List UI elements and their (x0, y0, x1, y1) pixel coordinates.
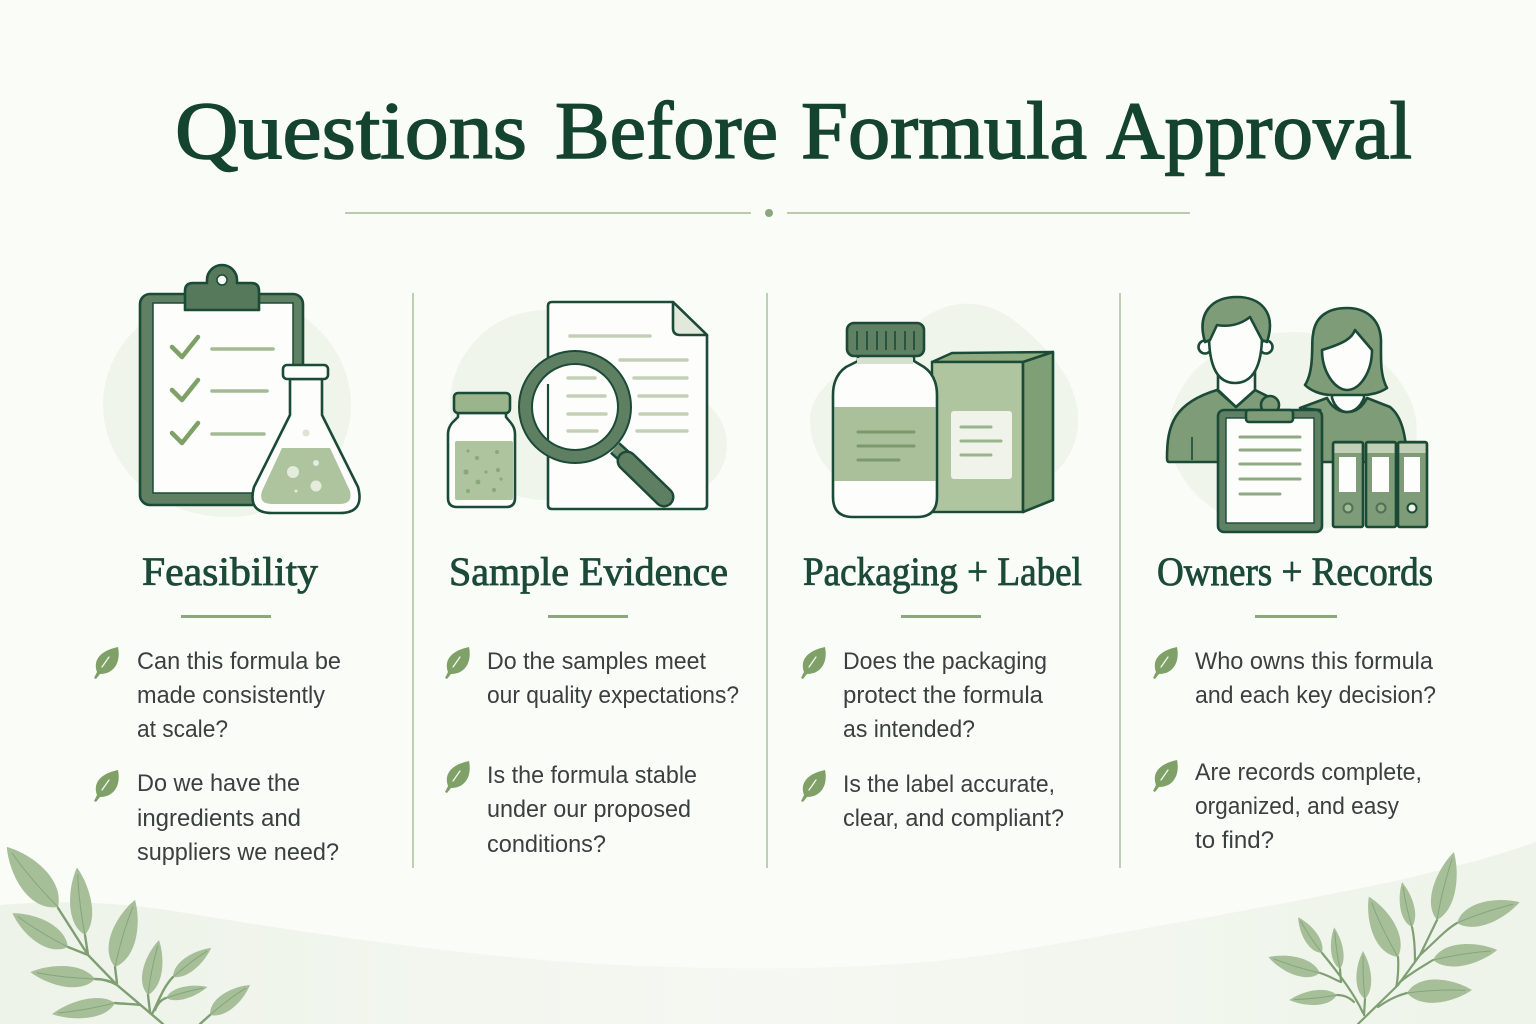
question text: Does the packaging (843, 648, 1047, 675)
woman (1300, 308, 1407, 462)
question text (1195, 759, 1422, 854)
question text: and each key decision? (1195, 682, 1436, 709)
icon: clipboard and flask (103, 265, 360, 517)
question text: Do we have the (137, 770, 300, 797)
question text (843, 648, 1047, 743)
heading underline (1255, 615, 1337, 618)
question text: suppliers we need? (137, 839, 339, 866)
question text: Can this formula be (137, 648, 341, 675)
heading: Packaging + Label (803, 549, 1082, 594)
question text (487, 762, 697, 858)
heading underline (548, 615, 628, 618)
binders (1333, 442, 1427, 527)
icon: jar, document and magnifier (448, 302, 727, 509)
panel: feasibility (94, 265, 360, 866)
heading: Owners + Records (1157, 549, 1433, 594)
background hill (0, 842, 1536, 1024)
heading underline (901, 615, 981, 618)
title: Questions (175, 85, 527, 176)
question text: our quality expectations? (487, 682, 739, 709)
question text: Are records complete, (1195, 759, 1422, 786)
bullet icon (801, 770, 826, 802)
bullet icon (94, 770, 119, 802)
panel: sample evidence (445, 302, 739, 858)
panel: packaging and label (801, 304, 1082, 832)
bullet icon (94, 647, 119, 679)
icon: bottle and box (810, 304, 1078, 517)
heading: Feasibility (142, 549, 318, 594)
question text: clear, and compliant? (843, 805, 1064, 832)
title divider (345, 209, 1190, 217)
question text: Is the formula stable (487, 762, 697, 789)
question text: conditions? (487, 831, 606, 858)
title: Before (555, 85, 778, 176)
question text (137, 770, 339, 866)
icon: two people, clipboard and binders (1167, 297, 1427, 532)
question text (1195, 648, 1436, 709)
title: Approval (1106, 85, 1412, 176)
bullet icon (1153, 760, 1178, 792)
bullet icon (801, 647, 826, 679)
heading underline (181, 615, 271, 618)
bullet icon (445, 647, 470, 679)
clipboard (1218, 396, 1322, 532)
question text (137, 648, 341, 743)
question text: under our proposed (487, 796, 691, 823)
man (1167, 297, 1275, 462)
bullet icon (445, 761, 470, 793)
question text: Is the label accurate, (843, 771, 1055, 798)
panel: owners and records (1153, 297, 1436, 854)
title (175, 85, 1412, 176)
decoration: left leaf branch (0, 838, 255, 1024)
question text (487, 648, 739, 709)
question text: protect the formula (843, 682, 1044, 709)
question text: organized, and easy (1195, 793, 1399, 820)
question text: to find? (1195, 827, 1274, 854)
question text: Do the samples meet (487, 648, 706, 675)
question text: made consistently (137, 682, 325, 709)
title: Formula (801, 85, 1087, 176)
question text: at scale? (137, 716, 228, 743)
question text (843, 771, 1064, 832)
decoration: right leaf branch (1266, 849, 1523, 1024)
bullet icon (1153, 647, 1178, 679)
heading: Sample Evidence (449, 549, 728, 594)
question text: ingredients and (137, 805, 301, 832)
question text: Who owns this formula (1195, 648, 1434, 675)
question text: as intended? (843, 716, 975, 743)
